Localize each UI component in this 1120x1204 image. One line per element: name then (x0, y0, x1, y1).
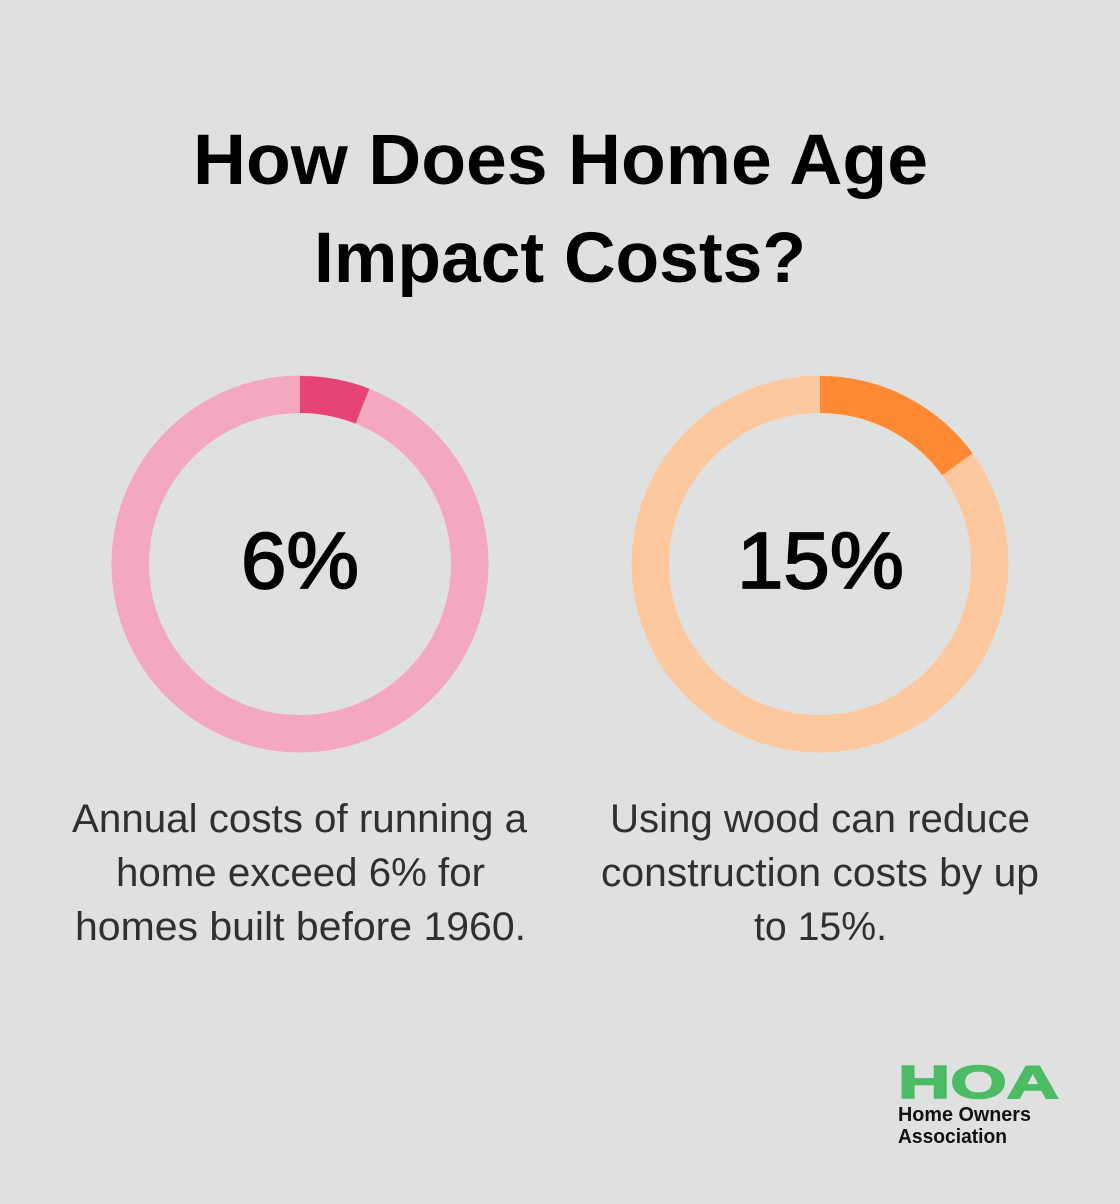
title (193, 121, 928, 298)
donut chart: 6% (130, 376, 470, 734)
logo name: Home Owners (898, 1104, 1031, 1126)
value: 6%: 6% (241, 516, 359, 605)
description: 6% statistic (72, 797, 528, 949)
description: 6% statistic: homes built before 1960. (75, 905, 526, 949)
panel: 6% statistic (72, 376, 528, 949)
description: 15% statistic: Using wood can reduce (610, 797, 1030, 841)
donut chart: 15% (650, 376, 990, 734)
description: 15% statistic: to 15%. (754, 905, 887, 949)
logo name (898, 1104, 1031, 1148)
description: 6% statistic: Annual costs of running a (72, 797, 528, 841)
description: 15% statistic: construction costs by up (601, 851, 1039, 895)
title: How Does Home Age (193, 121, 928, 200)
description: 6% statistic: home exceed 6% for (116, 851, 485, 895)
value: 15%: 15% (737, 516, 904, 605)
description: 15% statistic (601, 797, 1039, 949)
logo: Home Owners Association (898, 1056, 1059, 1148)
logo mark: HOA: HOA (898, 1056, 1059, 1108)
title: Impact Costs? (314, 219, 806, 298)
logo name: Association (898, 1126, 1007, 1148)
panel: 15% statistic (601, 376, 1039, 949)
